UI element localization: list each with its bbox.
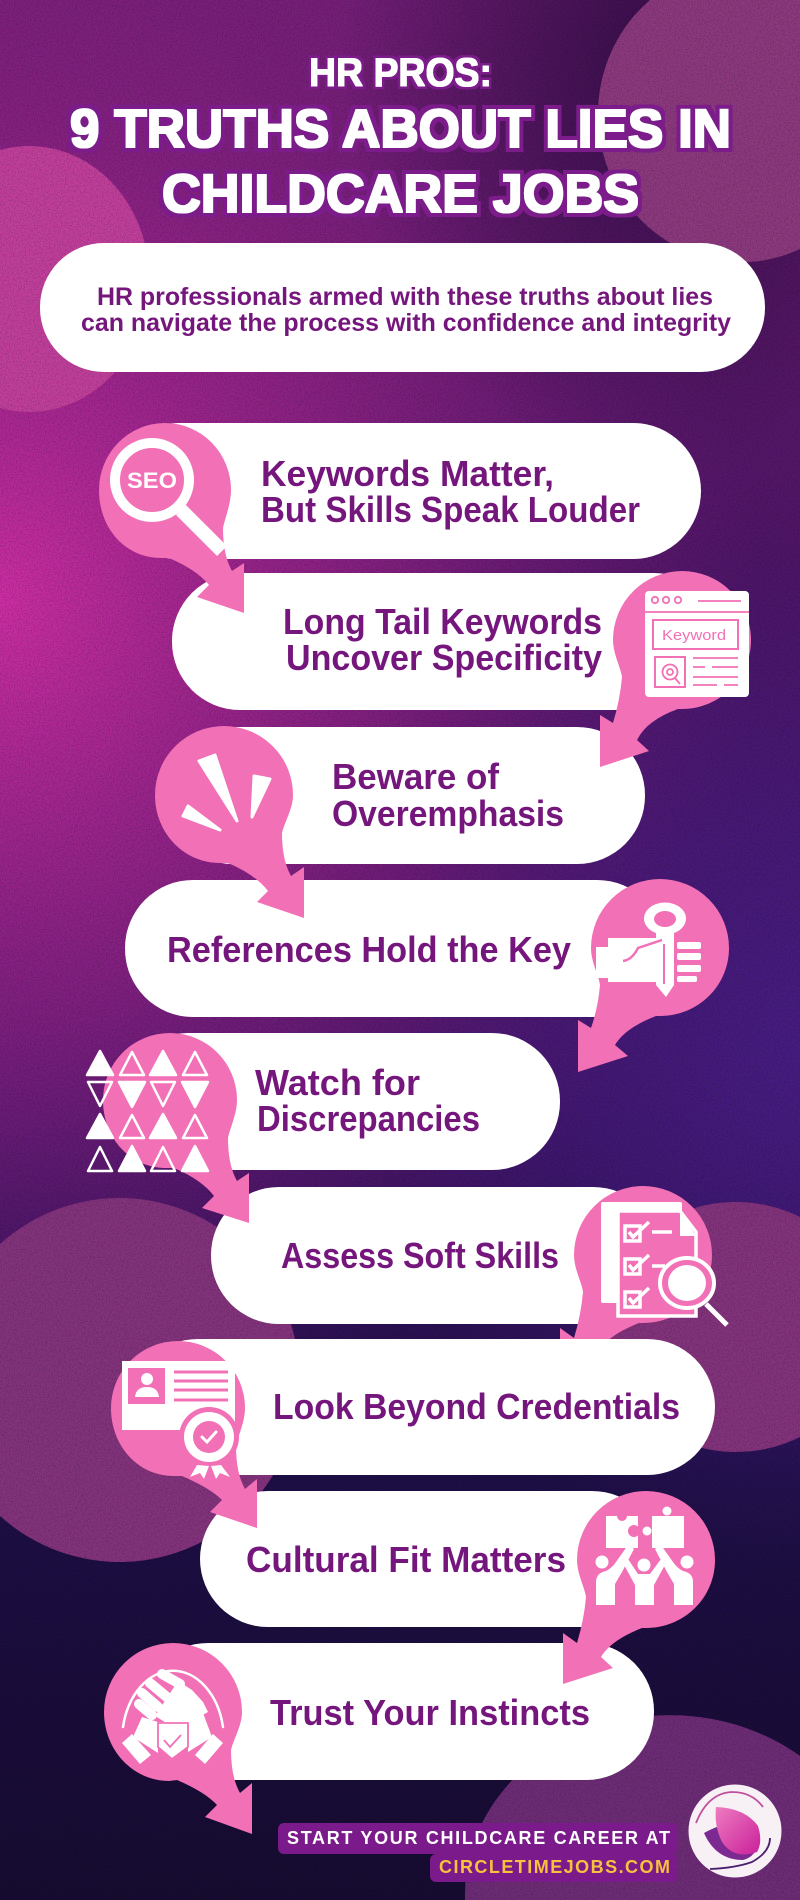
icon: SEO magnifier: SEO [127,468,177,493]
heading: Look Beyond Credentials [273,1386,680,1427]
panel: beware of overemphasis [155,726,645,918]
heading: Cultural Fit Matters [246,1539,566,1580]
label: website: CIRCLETIMEJOBS.COM [439,1857,670,1877]
icon: clasped hands with shield [122,1671,223,1764]
heading: Watch for [255,1062,420,1103]
icon: certificate with badge [122,1361,239,1479]
pin with arrow [600,571,751,767]
intro panel [40,243,765,372]
icon: keyword browser window [645,591,749,697]
heading: Discrepancies [257,1098,480,1139]
logo [688,1784,782,1878]
panel: long tail keywords [172,571,751,767]
pin with arrow [111,1341,257,1528]
pin with arrow [103,1033,249,1223]
panel: assess soft skills [211,1186,727,1379]
icon: triangle pattern [87,1051,208,1171]
decorative blob: bottom right [465,1715,800,1900]
footer call to action [278,1823,678,1882]
title [70,51,731,224]
heading: Trust Your Instincts [270,1692,590,1733]
title line: HR PROS: HR PROS: [309,51,492,95]
heading [261,453,640,530]
heading: Keywords Matter, [261,453,554,494]
decorative blob: middle left [0,1198,300,1562]
heading [332,756,564,834]
label: start your career: START YOUR CHILDCARE CAREER AT [287,1828,670,1848]
label: start your career [278,1823,678,1854]
heading: Assess Soft Skills [281,1235,559,1276]
decorative blob: middle right [601,1202,800,1452]
heading: Long Tail Keywords [283,601,602,642]
intro text: can navigate the process with confidence and integrity [81,309,731,337]
panel: look beyond credentials [111,1339,715,1528]
label: website [430,1854,678,1882]
pin with arrow [155,726,304,918]
title line: childcare jobs: CHILDCARE JOBS [162,164,639,224]
panel: watch for discrepancies [87,1033,560,1223]
icon: checklist with magnifier [601,1202,727,1325]
heading: Overemphasis [332,793,564,834]
panel: references hold the key [125,879,729,1072]
heading: But Skills Speak Louder [261,489,640,530]
icon: puzzle and people [596,1506,694,1605]
panel: trust your instincts [104,1643,654,1834]
pin with arrow [99,423,244,613]
title line: 9 truths about lies in: 9 TRUTHS ABOUT LIES IN [70,99,731,159]
heading: Beware of [332,756,500,797]
pin with arrow [578,879,729,1072]
icon: hand holding key [596,903,701,997]
heading: Uncover Specificity [286,637,602,678]
heading [255,1062,480,1139]
heading: References Hold the Key [167,929,571,970]
icon: burst lines [183,755,270,830]
pin with arrow [104,1643,252,1834]
decorative blob: top right [598,0,800,262]
panel: keywords matter [99,423,701,613]
icon: keyword browser window: Keyword [662,627,726,644]
pin with arrow [563,1491,715,1684]
heading [283,601,602,678]
panel: cultural fit matters [200,1491,715,1684]
pin with arrow [560,1186,712,1379]
intro text [81,283,731,337]
intro text: HR professionals armed with these truths about lies [97,283,713,311]
decorative blob: upper left [0,146,149,412]
icon: SEO magnifier [115,443,222,551]
